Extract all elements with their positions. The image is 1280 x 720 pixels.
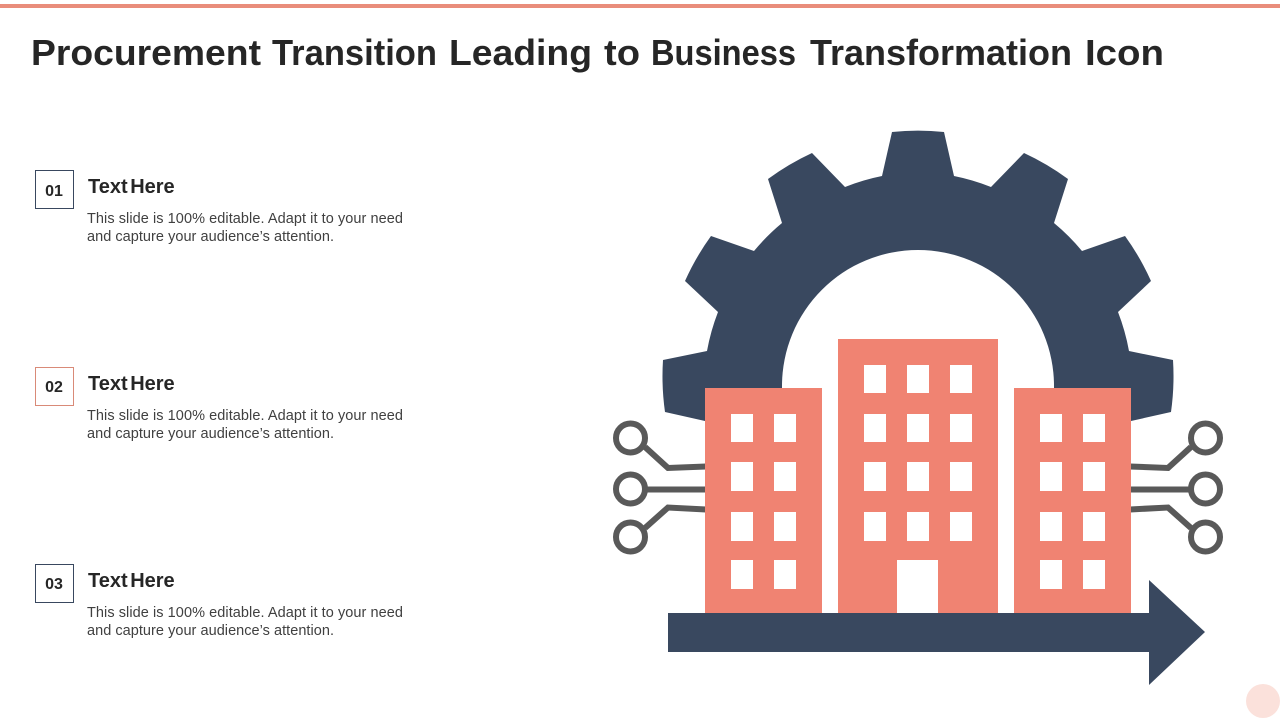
heading 01: Text Here: [88, 176, 175, 198]
title: Leading: [449, 32, 592, 73]
number box 02: 02: [45, 379, 63, 396]
icon: arrow: [668, 580, 1205, 685]
number box 01: [36, 170, 74, 208]
title: Business: [651, 32, 796, 73]
description 02: This slide is 100% editable. Adapt it to your need: [87, 408, 403, 424]
icon: business transformation: [616, 131, 1220, 685]
list item 02: [36, 368, 403, 442]
list item 03: [36, 564, 403, 639]
description 01: This slide is 100% editable. Adapt it to your need: [87, 211, 403, 227]
description 01: and capture your audience’s attention.: [87, 229, 334, 245]
icon: left circuit connectors: [616, 424, 706, 552]
decorative corner circle: [1246, 684, 1280, 718]
title: Procurement: [31, 32, 261, 73]
icon: right circuit connectors: [1130, 424, 1220, 552]
title: Icon: [1085, 32, 1164, 73]
description 03: This slide is 100% editable. Adapt it to your need: [87, 605, 403, 621]
title: Transformation: [810, 32, 1072, 73]
description 03: and capture your audience’s attention.: [87, 623, 334, 639]
number box 03: 03: [45, 576, 63, 593]
description 02: and capture your audience’s attention.: [87, 426, 334, 442]
heading 03: Text Here: [88, 570, 175, 592]
number box 03: [36, 564, 74, 602]
heading 02: Text Here: [88, 373, 175, 395]
icon: right building: [1014, 388, 1131, 614]
icon: left building: [705, 388, 822, 614]
number box 02: [36, 368, 74, 406]
list item 01: [36, 170, 403, 245]
title: Transition: [272, 32, 437, 73]
icon: gear: [662, 131, 1174, 421]
title: to: [604, 32, 640, 73]
number box 01: 01: [45, 183, 63, 200]
icon: centre building: [838, 339, 998, 614]
